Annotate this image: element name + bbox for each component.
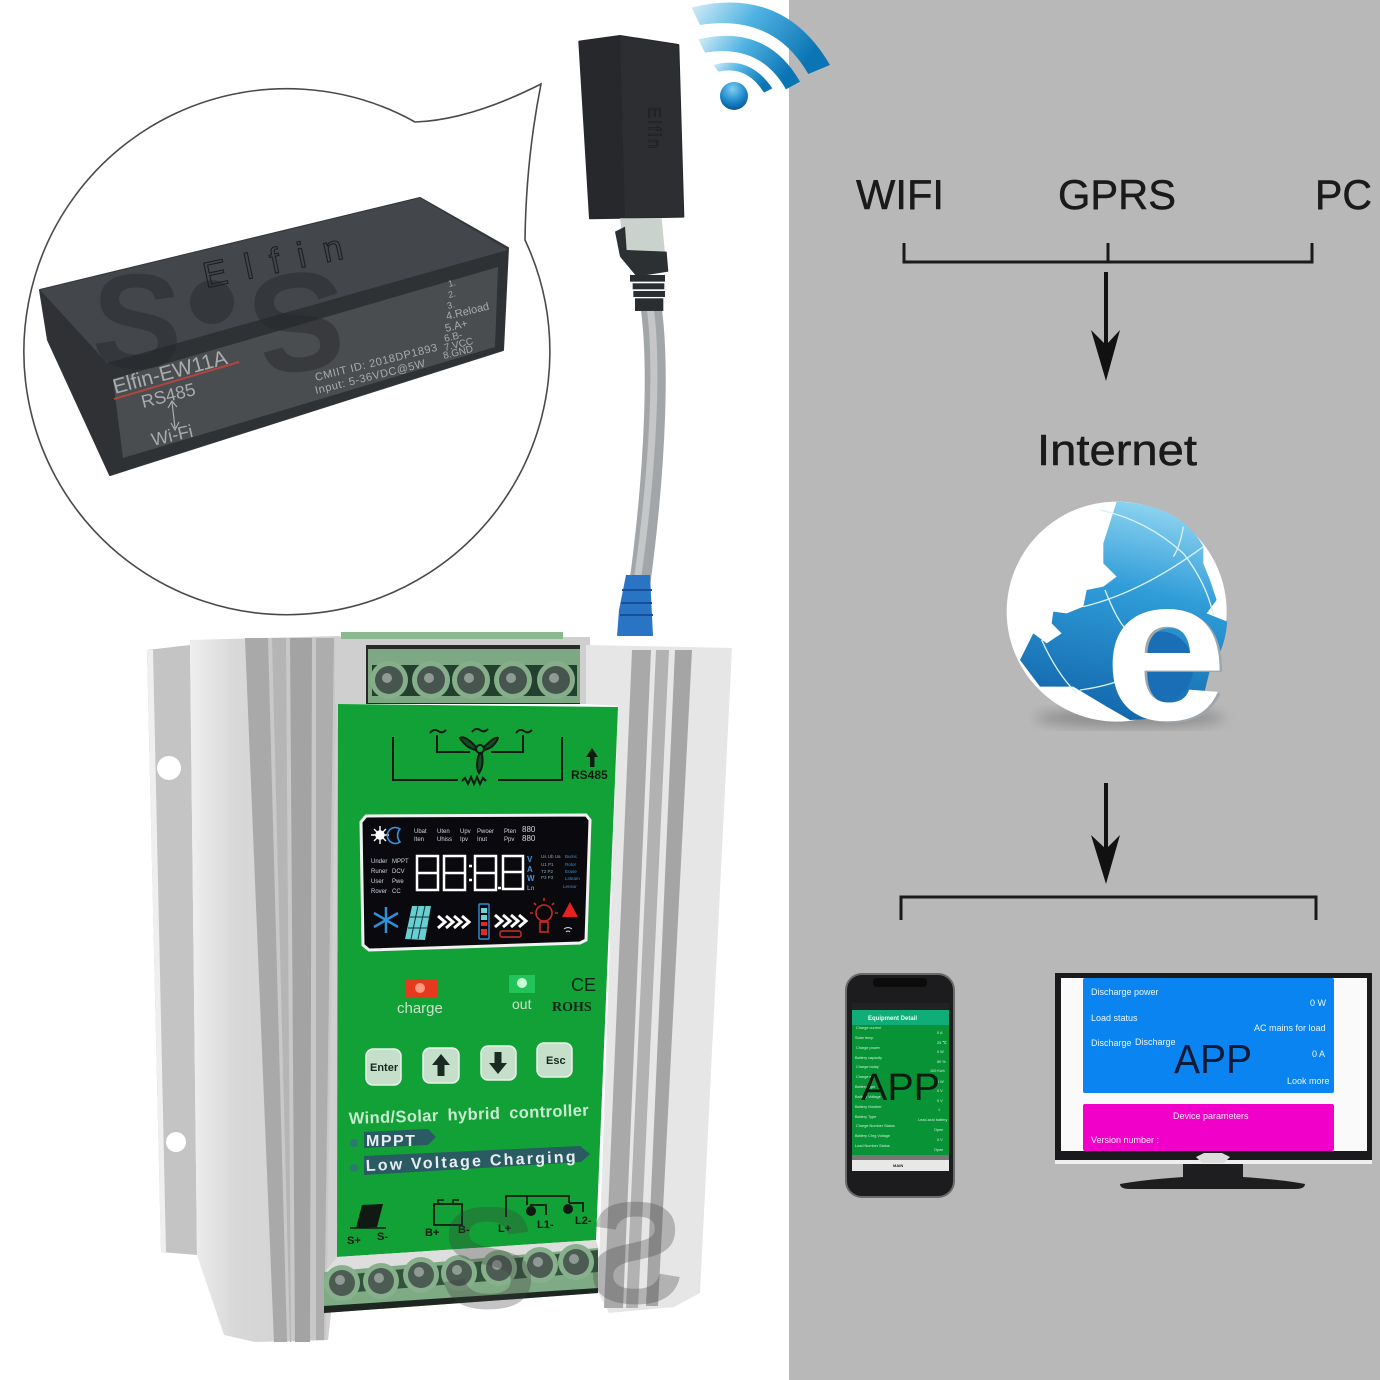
module label text: 1.: [447, 277, 457, 289]
button Esc: Esc: [546, 1055, 566, 1067]
left aluminium side: [190, 636, 340, 1342]
strain relief: [630, 275, 665, 311]
solar terminal icon: S+: [347, 1235, 361, 1247]
MPPT ribbon: MPPT: [366, 1133, 416, 1150]
monitor screen: [1061, 978, 1367, 1151]
letter e shadow: e: [1107, 536, 1230, 765]
screw: [522, 1247, 558, 1283]
globe shadow: [1035, 709, 1225, 727]
LCD right status labels: Erase: [565, 869, 577, 874]
LCD right status labels: Us Ub Ua: [541, 854, 561, 859]
heading: GPRS: GPRS: [1058, 171, 1176, 218]
phone status bar: [852, 1003, 949, 1010]
out label: out: [512, 996, 532, 1012]
LCD unit labels: V: [527, 855, 533, 864]
app rows: Solar temp: [855, 1036, 873, 1040]
controller enclosure: [147, 632, 732, 1342]
logo watermark on controller: [440, 1172, 684, 1339]
app rows: Load Number Status: [855, 1144, 890, 1148]
blue status card: 0 A: [1312, 1049, 1325, 1059]
app rows: 80 %: [937, 1060, 946, 1064]
mounting hole upper: [157, 756, 181, 780]
app rows: 0 W: [937, 1080, 944, 1084]
warning triangle: [562, 902, 578, 917]
app bottom bar: [852, 1155, 949, 1171]
APP label on phone: APP: [861, 1067, 940, 1109]
blue status card: Discharge power: [1091, 987, 1159, 997]
bubble outline: [24, 84, 550, 615]
left fins: [245, 638, 337, 1342]
blue status card: AC mains for load: [1254, 1023, 1326, 1033]
cable from module to controller: [617, 300, 655, 636]
blue status card: 0 W: [1310, 998, 1327, 1008]
fan icon: [374, 907, 398, 933]
icon: globe with e: [1007, 502, 1230, 765]
LCD left status labels: Rover: [371, 889, 387, 895]
app rows: Open: [934, 1148, 943, 1152]
module label text: RS485: [139, 379, 197, 412]
double arrow RS485 to Wi-Fi: [168, 401, 179, 430]
button down: [481, 1046, 516, 1080]
panel: green controller faceplate: [337, 704, 618, 1257]
module body: [579, 36, 683, 218]
app rows: Battery Chrg Voltage: [855, 1134, 890, 1138]
LCD top status labels: Inut: [477, 837, 487, 843]
app rows: Battery type: [855, 1085, 875, 1089]
screw: [363, 1263, 399, 1299]
module enlarged body: [40, 198, 508, 475]
app rows: Charge all: [856, 1075, 873, 1079]
LCD left status labels: [371, 859, 409, 895]
LCD top status labels: Pwoer: [477, 829, 494, 835]
blue status card: Look more: [1287, 1076, 1330, 1086]
arrow up RS485: [586, 748, 598, 767]
screw: [494, 661, 532, 699]
app rows: 0 V: [937, 1089, 943, 1093]
LCD right status labels: U1 P1: [541, 862, 554, 867]
LCD right status labels: P3 P3: [541, 875, 554, 880]
arrow down to apps: [1091, 783, 1120, 884]
app rows: Charge current: [856, 1026, 882, 1030]
module label text: 8.GND: [442, 344, 474, 362]
app header: [852, 1010, 949, 1025]
logo watermark on module: S: [241, 238, 356, 407]
solar panel icon: [405, 906, 431, 940]
app bottom bar: MAIN: [893, 1163, 903, 1168]
clear RJ45 plug: [620, 218, 665, 257]
left mounting bracket: [147, 645, 197, 1255]
app rows: 0 V: [937, 1099, 943, 1103]
LCD top status labels: 880: [522, 834, 536, 843]
module label text: CMIIT ID: 2018DP1893: [314, 342, 439, 384]
screw: [558, 1244, 594, 1280]
moon icon: [387, 828, 400, 844]
LCD left status labels: Runer: [371, 869, 387, 875]
battery icon: [479, 904, 489, 939]
LCD top status labels: Ubat: [414, 829, 427, 835]
app rows: 25 ℃: [937, 1041, 947, 1045]
app rows: 0 A: [937, 1031, 943, 1035]
app rows: 0 V: [937, 1138, 943, 1142]
black plug boot: [615, 227, 668, 277]
LCD frame: [361, 815, 590, 950]
logo watermark on controller: S: [440, 1177, 537, 1339]
LCD left status labels: MPPT: [392, 859, 409, 865]
app header: Equipment Detail: [868, 1016, 917, 1022]
logo watermark on module: [92, 238, 356, 407]
battery terminal icon: B-: [458, 1224, 470, 1236]
LCD top status labels: Upv: [460, 829, 471, 835]
LCD left status labels: DCV: [392, 869, 405, 875]
module label text: 2.: [447, 288, 457, 300]
screw: [370, 661, 408, 699]
load terminals icon: L2-: [575, 1215, 592, 1227]
e counter shading: [1130, 632, 1193, 702]
app rows: Battery capacity: [855, 1056, 882, 1060]
CE mark: CE: [571, 975, 596, 995]
blue sea and land: [1020, 502, 1227, 720]
icon: wifi signal: [692, 2, 830, 110]
heading: PC: PC: [1315, 171, 1372, 218]
LCD left status labels: User: [371, 879, 384, 885]
module right face: [620, 36, 683, 218]
sun icon: [371, 826, 389, 844]
LCD right status labels: Rotor: [565, 862, 577, 867]
blue status card: [1083, 978, 1334, 1093]
logo watermark on module: S: [92, 246, 182, 397]
module label text: 6.B-: [443, 330, 464, 345]
module label text: 3.: [446, 299, 456, 311]
magenta parameters card: Version number :: [1091, 1135, 1159, 1145]
module label text: [110, 277, 490, 450]
app rows: 0 W: [937, 1050, 944, 1054]
magenta parameters card: Device parameters: [1173, 1111, 1249, 1121]
app rows: Battery Number: [855, 1105, 882, 1109]
ROHS mark: ROHS: [552, 1000, 592, 1015]
phone with app: [846, 974, 954, 1197]
screw: [324, 1265, 360, 1301]
solar terminal icon: S-: [377, 1231, 388, 1243]
module label text: Input: 5-36VDC@5W: [314, 358, 427, 397]
red rule under model name: [114, 362, 239, 399]
out LED: [509, 975, 535, 993]
bracket splitting to phone and monitor: [901, 897, 1316, 920]
blue status card: Discharge: [1091, 1038, 1132, 1048]
RS485 label: RS485: [571, 768, 608, 782]
LCD top status labels: Uhiss: [437, 837, 452, 843]
wind turbine wiring diagram: [393, 729, 562, 784]
app rows: Charge Number Status: [856, 1124, 895, 1128]
seven segment readout 8888: [417, 856, 523, 890]
LCD top status labels: Iten: [414, 837, 424, 843]
phone body: [846, 974, 954, 1197]
LCD right status labels: Burns: [565, 854, 578, 859]
LCD top status labels: [414, 825, 536, 843]
LCD top status labels: Ipv: [460, 837, 468, 843]
right aluminium side: [586, 645, 732, 1313]
blue connector boot: [617, 575, 653, 636]
solar terminal icon: [347, 1204, 388, 1247]
module label text: Elfin-EW11A: [110, 346, 230, 399]
LCD unit labels: W: [527, 874, 535, 883]
load terminals icon: [498, 1196, 592, 1235]
button Enter: [366, 1049, 401, 1085]
LCD left status labels: CC: [392, 889, 401, 895]
mounting hole lower: [166, 1132, 186, 1152]
battery terminal icon: B+: [425, 1227, 439, 1239]
screw: [403, 1257, 439, 1293]
lower white strip: [324, 1240, 599, 1273]
screw: [441, 1255, 477, 1291]
globe sphere: [1007, 502, 1227, 722]
module label text: 5.A+: [444, 318, 469, 335]
LCD left status labels: Under: [371, 859, 387, 865]
app rows: Battery Voltage: [855, 1095, 881, 1099]
LCD left status labels: Pwe: [392, 879, 404, 885]
faceplate: [337, 704, 618, 1257]
monitor stand base: [1120, 1162, 1305, 1189]
top terminal block: [366, 645, 580, 704]
Low Voltage Charging ribbon: Low Voltage Charging: [365, 1149, 576, 1175]
tiny wifi icon: [564, 928, 572, 932]
vertical Elfin lettering: Elfin: [644, 107, 664, 150]
app screen: [852, 1025, 949, 1155]
LCD top status labels: Uten: [437, 829, 450, 835]
LCD top status labels: Pten: [504, 829, 516, 835]
panel: grey network diagram background: [789, 0, 1380, 1380]
app rows: [855, 1026, 947, 1152]
charge arrows left: [438, 916, 469, 928]
app rows: Lead-acid battery: [918, 1118, 947, 1122]
grid lines: [1042, 510, 1213, 697]
bulb icon: [530, 898, 558, 932]
app rows: 100 Kwh: [930, 1069, 945, 1073]
charge label: charge: [397, 1000, 443, 1017]
app rows: Charge power: [856, 1046, 881, 1050]
small Wi-Fi module with RJ45 plug: [579, 36, 683, 311]
screw: [412, 661, 450, 699]
blue status card: Discharge: [1135, 1037, 1176, 1047]
app rows: Charge today: [856, 1065, 879, 1069]
screw: [537, 661, 575, 699]
top rail: [335, 637, 590, 704]
LCD unit labels: Ln: [527, 886, 535, 892]
monitor bottom trim: [1055, 1160, 1372, 1164]
module label text: 7.VCC: [443, 336, 474, 354]
top green connector strip: [341, 632, 563, 639]
logo watermark on controller: S: [587, 1172, 684, 1334]
battery terminal icon: [425, 1200, 470, 1239]
arrow down to Internet: [1091, 272, 1120, 381]
callout bubble: enlarged Wi-Fi module: [24, 84, 550, 615]
phone notch: [873, 978, 927, 987]
screw: [481, 1250, 517, 1286]
load terminals icon: L+: [498, 1223, 511, 1235]
app rows: Battery Type: [855, 1115, 876, 1119]
resistor icon: [500, 931, 521, 937]
grey cable: [640, 300, 655, 582]
LCD unit labels: A: [527, 865, 533, 874]
app rows: Open: [934, 1128, 943, 1132]
module label text: 4.Reload: [445, 301, 490, 323]
button Esc: [537, 1043, 572, 1077]
heading: Internet: Internet: [1037, 426, 1197, 475]
LCD top status labels: Ppv: [504, 837, 514, 843]
LCD right status labels: Lsteam: [565, 876, 580, 881]
heading: WIFI: WIFI: [856, 171, 944, 218]
button Enter: Enter: [370, 1062, 399, 1074]
LCD unit labels: [527, 855, 535, 892]
button up: [423, 1048, 459, 1083]
module label text: Wi-Fi: [149, 421, 195, 450]
LCD right status labels: [541, 854, 580, 889]
LCD display: [361, 815, 590, 950]
right fins: [604, 650, 692, 1308]
LCD right status labels: T2 P2: [541, 869, 554, 874]
monitor with app: [1055, 973, 1372, 1189]
cable highlight: [637, 300, 654, 582]
MPPT ribbon: [350, 1129, 436, 1150]
bracket joining WIFI GPRS PC: [904, 243, 1312, 262]
charge LED: [406, 980, 438, 998]
bracket edge: [147, 650, 166, 1252]
screw: [452, 661, 490, 699]
bottom terminal block: [324, 1244, 598, 1313]
monitor logo badge: [1196, 1153, 1230, 1163]
LCD top status labels: 880: [522, 825, 536, 834]
embossed Elfin lettering: Elfin: [199, 226, 347, 296]
charge arrows right: [495, 915, 526, 927]
LCD right status labels: Lensor: [563, 884, 577, 889]
APP label on monitor: APP: [1174, 1036, 1252, 1082]
monitor bezel: [1055, 973, 1372, 1164]
app rows: 1: [938, 1108, 940, 1112]
load terminals icon: L1-: [537, 1219, 554, 1231]
letter e: e: [1104, 535, 1227, 764]
magenta parameters card: [1083, 1104, 1334, 1151]
product title: Wind/Solar hybrid controller: [349, 1102, 590, 1128]
blue status card: Load status: [1091, 1013, 1138, 1023]
